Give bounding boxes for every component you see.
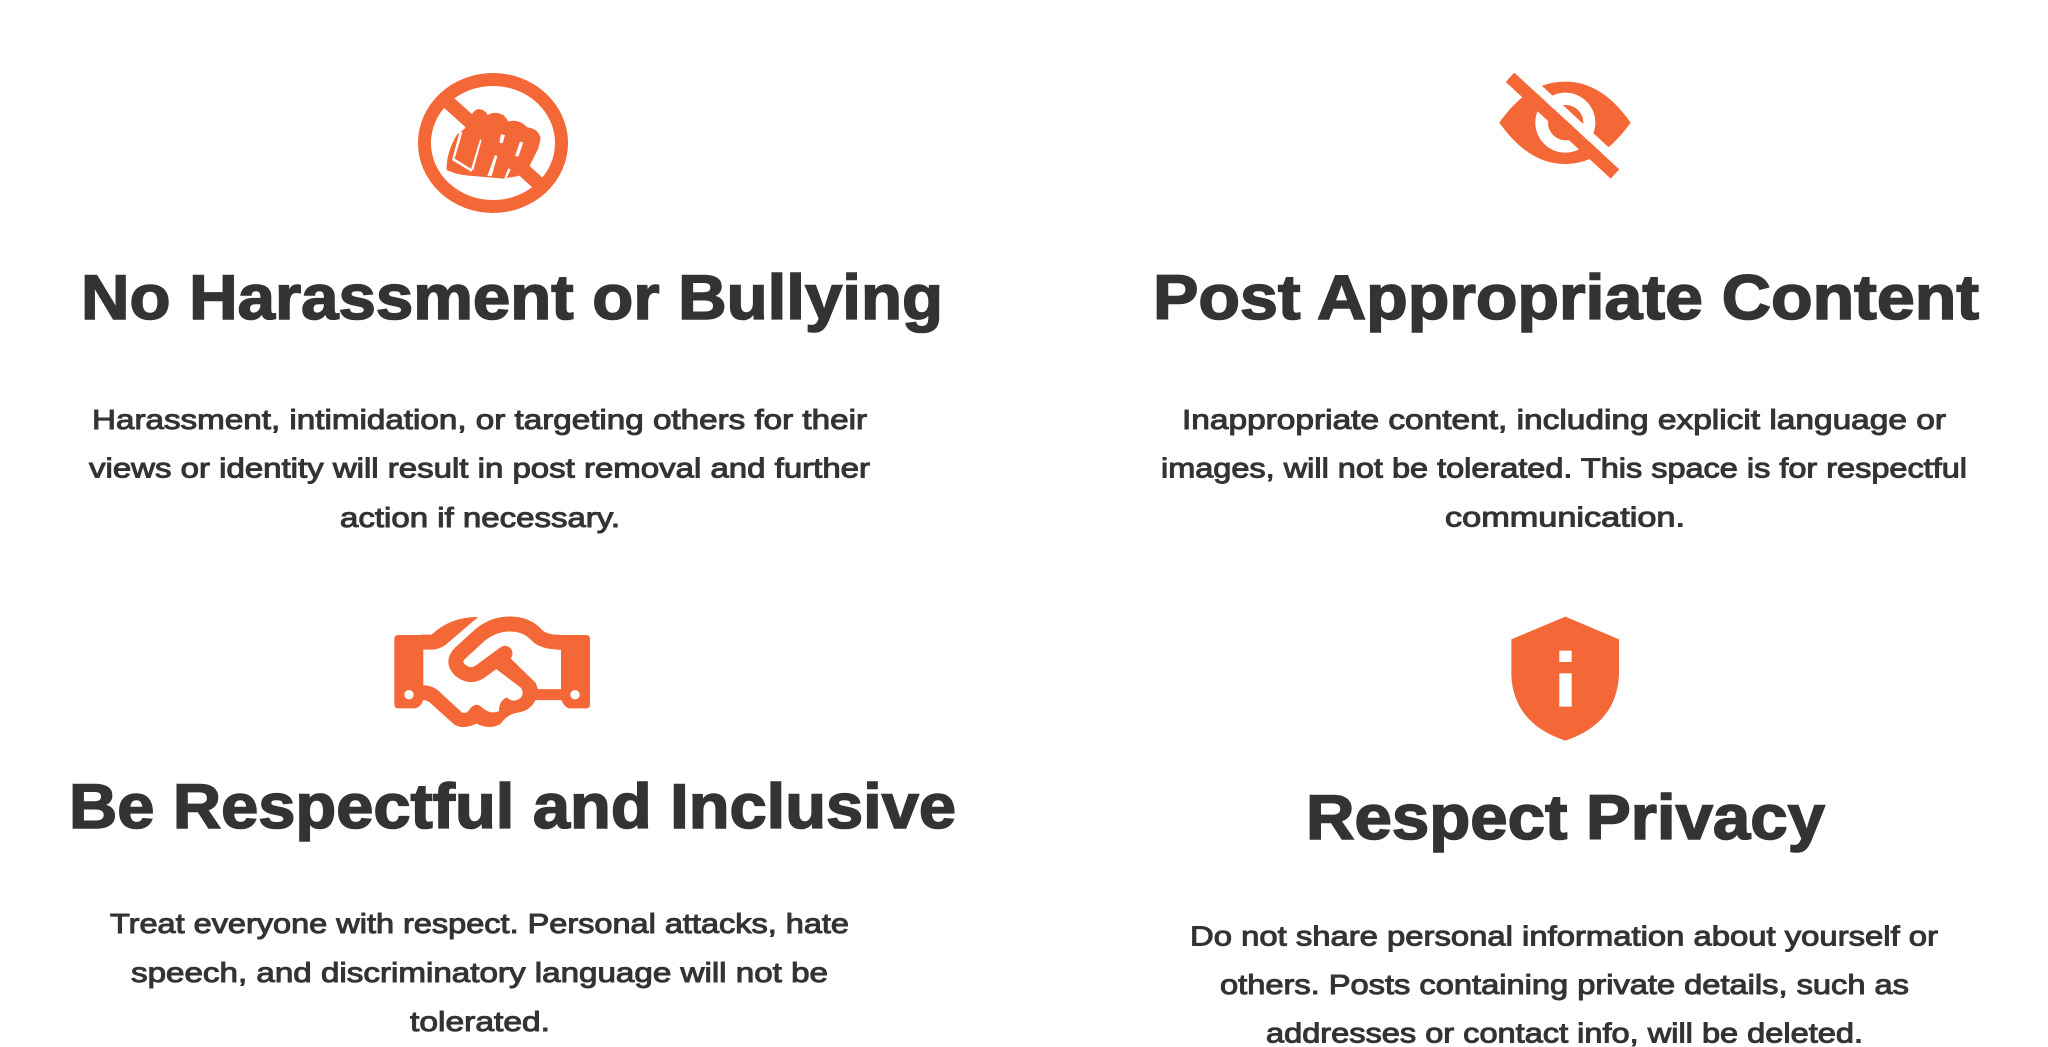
body text bbox=[110, 908, 849, 1037]
heading: Respect Privacy bbox=[1306, 783, 1825, 853]
panel: be respectful and inclusive bbox=[69, 617, 956, 1037]
heading: Post Appropriate Content bbox=[1153, 263, 1979, 333]
icon: fist in prohibition sign bbox=[424, 80, 562, 206]
panel: respect privacy bbox=[1190, 617, 1938, 1047]
body text bbox=[1190, 920, 1938, 1047]
panel: post appropriate content bbox=[1153, 69, 1979, 533]
body text: speech, and discriminatory language will not be bbox=[131, 957, 828, 988]
body text: communication. bbox=[1445, 502, 1685, 532]
body text: Inappropriate content, including explicit language or bbox=[1182, 404, 1946, 435]
icon: shield with info mark bbox=[1511, 617, 1619, 741]
heading: Be Respectful and Inclusive bbox=[69, 772, 956, 842]
body text bbox=[89, 404, 870, 533]
icon: crossed-out eye bbox=[1499, 69, 1631, 174]
heading: No Harassment or Bullying bbox=[81, 263, 943, 333]
body text: Harassment, intimidation, or targeting others for their bbox=[92, 404, 867, 435]
body text: tolerated. bbox=[410, 1006, 550, 1037]
body text: others. Posts containing private details, such as bbox=[1220, 969, 1909, 1000]
body text bbox=[1161, 404, 1967, 532]
icon: handshake bbox=[394, 617, 590, 726]
body text: images, will not be tolerated. This space is for respectful bbox=[1161, 452, 1967, 484]
body text: Treat everyone with respect. Personal attacks, hate bbox=[110, 908, 849, 939]
body text: Do not share personal information about yourself or bbox=[1190, 920, 1938, 952]
panel: no harassment or bullying bbox=[81, 80, 943, 533]
body text: action if necessary. bbox=[340, 502, 620, 533]
body text: views or identity will result in post removal and further bbox=[89, 452, 870, 484]
